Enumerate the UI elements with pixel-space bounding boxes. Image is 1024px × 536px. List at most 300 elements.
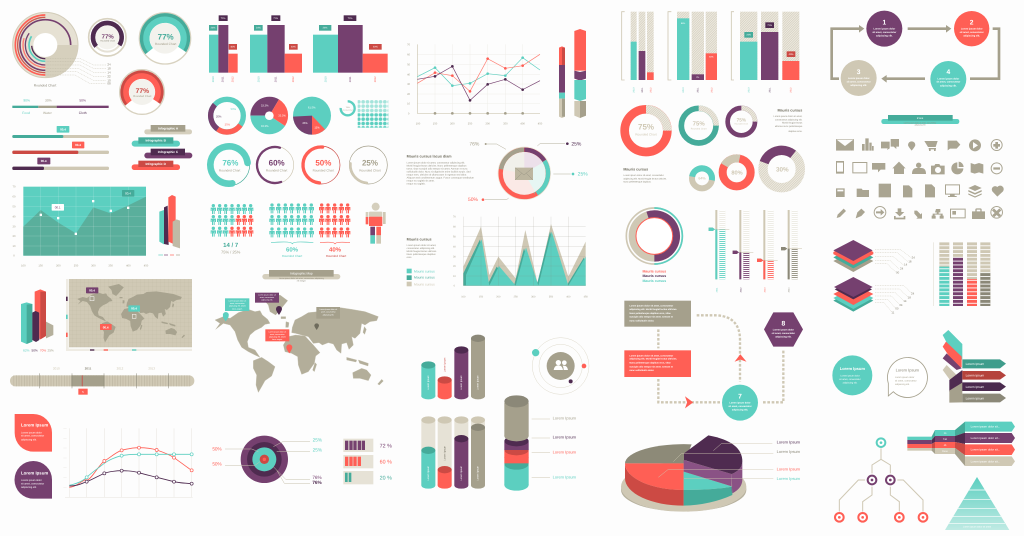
world map <box>215 295 383 392</box>
text: mauris cursus right: ultricies nunc pellentesque <box>775 125 802 128</box>
step 7 circle <box>722 385 758 421</box>
target chart with percent labels: 25% <box>313 447 322 453</box>
node tree <box>835 438 927 522</box>
area chart: 00.1 <box>55 206 61 209</box>
icon: pencil <box>837 209 846 218</box>
progress bars with tags: 00.4 <box>41 159 47 163</box>
donut: teal 75% <box>681 105 719 143</box>
hatched bar group large: 2012 <box>790 87 792 93</box>
cylinders row two with full height tracks: Lorem Ipsum <box>460 466 463 481</box>
dotted world map with tags: 00.4 <box>89 289 95 292</box>
icon: doc two <box>925 184 935 197</box>
funnel arrows: 20 <box>944 432 946 435</box>
layer stack one leaders: 18 <box>908 260 912 263</box>
area chart: 00.4 <box>125 192 131 195</box>
text: mauris cursus lacus diam: neque eu sagittis. <box>407 182 425 185</box>
donut: teal 77%: 77% <box>158 32 174 41</box>
area chart <box>13 185 148 267</box>
donut: hatched 30%: 30% <box>776 166 789 173</box>
ribbon title: infographic map <box>262 270 340 282</box>
text: mauris cursus left: Nunc pellentesque dapibus. <box>623 181 651 183</box>
people grid 60% / 40% <box>269 203 350 258</box>
labels of concentric chart: 14 <box>107 71 111 74</box>
3D pie chart: Lorem Ipsum <box>777 449 800 454</box>
text box: coral <box>624 350 691 377</box>
labels of concentric chart <box>34 63 111 88</box>
layered area chart: 250 <box>514 295 518 298</box>
text and legend: mauris cursus: Mauris cursus <box>414 276 435 280</box>
ring chart with envelope icon <box>468 141 588 206</box>
speech bubble: adipiscing elit. <box>895 383 910 386</box>
batteries with percentages: 72 % <box>380 443 392 449</box>
multi-line chart: 70 <box>407 43 410 46</box>
ribbon: icons: adipiscing elit <box>914 124 926 126</box>
callout: teal <box>223 298 249 321</box>
callout: teal: amet, consectetur <box>230 303 245 305</box>
ribbon: icons: Icons <box>917 117 923 120</box>
bar chart large: 2012 <box>374 76 377 82</box>
radial gauge with legend: Mauris cursus <box>642 279 666 283</box>
callout: coral: Lorem ipsum dolor sit <box>269 331 286 333</box>
donut: purple 77%: 77% <box>102 33 114 40</box>
step 4 circle <box>930 61 966 97</box>
rounded chart 50%: Rounded Chart <box>313 169 334 172</box>
text box: coral: nunc sollicitudin dolor. <box>629 369 654 372</box>
ribbon title: infographic map: elit integer <box>297 280 306 282</box>
timeline slider: 2012 <box>117 367 123 370</box>
cylinders row one: Lorem Ipsum <box>460 375 463 390</box>
pie with centre hole: 33.3% <box>261 125 268 128</box>
batteries with percentages: 20 % <box>380 475 392 481</box>
big stacked cylinder <box>504 395 576 491</box>
icon: id card <box>950 209 966 218</box>
text box: taupe: nunc sollicitudin dolor. <box>629 320 654 322</box>
card: coral lorem ipsum: Lorem ipsum dolor <box>21 431 42 434</box>
text and legend: mauris cursus: consectetur adipiscing elit. <box>407 247 435 250</box>
striped column chart <box>934 242 990 306</box>
bar chart large: 2010 <box>324 76 327 82</box>
area chart: 200 <box>56 264 61 267</box>
step 4 circle: sit amet, consectetur <box>936 80 960 83</box>
card: purple lorem ipsum: adipiscing elit. <box>21 486 37 489</box>
layered area chart <box>453 215 588 298</box>
text and legend: mauris cursus <box>407 237 437 286</box>
donut: purple 75% <box>728 106 757 135</box>
card: coral lorem ipsum: sit amet, consectetur <box>21 434 44 437</box>
bar chart small: 71% <box>221 17 225 20</box>
step 7 circle: Lorem ipsum dolor <box>729 402 751 404</box>
icon: map <box>971 163 983 174</box>
text and legend: mauris cursus: Lorem ipsum dolor sit amet, <box>407 244 436 247</box>
layered area chart: 350 <box>549 295 553 298</box>
funnel arrows: Lorem ipsum dolor sit... <box>971 460 1000 463</box>
icon: minus <box>991 162 1003 174</box>
cylinders row two with full height tracks: Lorem Ipsum <box>427 466 430 481</box>
step 2 circle: adipiscing elit. <box>963 34 980 37</box>
step 3 circle: 3 <box>857 68 861 76</box>
dot pattern stat <box>341 100 388 128</box>
3D bars with percentages: 50% <box>31 349 38 353</box>
ring chart with envelope icon: 25% <box>571 141 581 147</box>
bar chart medium <box>250 15 302 82</box>
step 1 circle: Lorem ipsum dolor <box>873 27 895 30</box>
callout: coral: adipiscing elit. Morbi <box>269 336 286 338</box>
callout: purple: amet, consectetur <box>260 297 274 299</box>
bar chart medium: 71% <box>273 17 278 20</box>
stacked bar with labels: 50% <box>79 99 86 103</box>
layer stack two leaders: 24 <box>911 292 914 295</box>
3D bars with percentages: 25% <box>47 349 54 353</box>
layered area chart: 200 <box>496 295 500 298</box>
step 1 circle: adipiscing elit. <box>876 34 893 37</box>
progress bars with tags: 00.4 <box>75 143 81 147</box>
bar chart large: 40% <box>373 46 378 48</box>
icon: hierarchy <box>932 209 944 219</box>
stacked bar with labels: Cloth <box>79 111 87 115</box>
multi-line chart: 50 <box>407 63 410 66</box>
icon: people <box>912 163 926 174</box>
radial gauge with legend: Mauris cursus <box>642 274 666 278</box>
step 3 circle: adipiscing elit. <box>850 84 867 87</box>
labels of concentric chart: Rounded Chart <box>34 84 56 88</box>
folded ribbon arrows: Lorem Ipsum <box>966 374 984 378</box>
icon: envelope <box>836 139 854 151</box>
cylinders row one: Lorem Ipsum <box>476 375 479 390</box>
thermometer gauges: 2011 <box>716 288 718 292</box>
step 1 circle: sit amet, consectetur <box>872 31 896 34</box>
icon: pin <box>908 141 915 151</box>
callout: taupe <box>314 307 340 330</box>
labels of concentric chart: 22 <box>107 75 111 78</box>
labels of concentric chart: 10 <box>107 79 111 82</box>
donut: teal 75%: Rounded Chart <box>691 127 707 130</box>
area chart: 10 <box>13 245 16 248</box>
panel: column five, top <box>832 11 1004 219</box>
text box: coral: Lorem ipsum dolor sit amet, consectetur <box>629 355 673 357</box>
labels of concentric chart: 24 <box>107 63 111 66</box>
teal circle card <box>832 355 872 395</box>
donut: teal 64% <box>690 167 714 190</box>
callout: purple: adipiscing elit. <box>261 299 273 301</box>
hatched bar group medium: 50% <box>709 56 714 58</box>
layered area chart: 300 <box>531 295 535 298</box>
step 2 circle: sit amet, consectetur <box>960 31 984 34</box>
big stacked cylinder: Lorem Ipsum <box>553 475 576 479</box>
pie chart: 12% <box>314 126 320 129</box>
text box: taupe: Lorem ipsum dolor sit amet, consectetur <box>629 305 673 307</box>
timeline slider <box>10 367 194 395</box>
people grid 14 / 7 <box>211 204 253 255</box>
layer stack two leaders: 00 <box>895 307 899 310</box>
ribbon: icons <box>881 115 959 126</box>
hatched bar group large: 2011 <box>769 87 771 93</box>
icon: heart <box>992 186 1004 197</box>
rounded chart 50% <box>301 145 340 184</box>
donut: coral 77%: Rounded Chart <box>133 95 152 98</box>
step 2 circle: Lorem ipsum dolor <box>961 27 983 30</box>
callout: taupe: adipiscing elit. <box>323 314 334 316</box>
text box: taupe <box>624 301 691 327</box>
bar chart medium: 24% <box>256 27 261 29</box>
icon: arrow down right <box>914 211 922 219</box>
text: mauris cursus left: Mauris cursus <box>623 167 648 171</box>
icon: play <box>969 139 981 151</box>
speech bubble: sit amet, consectetur <box>895 379 917 382</box>
people grid 14 / 7: 14 / 7 <box>223 242 238 248</box>
icon: house <box>892 162 906 174</box>
icon: phone <box>836 161 844 174</box>
bar chart small: 2012 <box>231 76 234 82</box>
stacked bar with labels: 90% <box>23 99 30 103</box>
funnel arrows: Lorem ipsum dolor sit... <box>971 425 1000 428</box>
multi-line chart: 450 <box>538 122 542 125</box>
donut: purple 77%: Rounded Chart <box>100 40 115 42</box>
pie with centre hole: 33.3% <box>261 104 268 107</box>
card: purple lorem ipsum: Lorem Ipsum <box>21 470 48 475</box>
rounded chart 76%: Rounded Chart <box>219 169 241 172</box>
hatched bar group medium: 2010 <box>682 87 685 93</box>
area chart: 350 <box>108 264 113 267</box>
ribbons: infographic A to D <box>132 125 192 170</box>
card: purple lorem ipsum <box>14 461 52 499</box>
area chart: 100 <box>21 264 26 267</box>
rounded chart 60%: Rounded Chart <box>266 169 288 172</box>
text: mauris cursus left <box>623 167 667 183</box>
folded ribbon arrows: Lorem Ipsum <box>966 362 984 366</box>
text box: taupe: adipiscing elit. Morbi feugiat lectus ultricies. <box>629 308 677 311</box>
curve line chart <box>63 428 193 497</box>
batteries with percentages <box>343 439 392 484</box>
icon: tag <box>948 141 960 150</box>
radial gauge with legend <box>626 208 682 283</box>
bar chart large <box>313 15 388 82</box>
icon: folder <box>857 189 869 197</box>
stacked bar with labels <box>12 99 109 115</box>
icon: layers <box>968 185 982 198</box>
labels of concentric chart: 18 <box>107 67 111 70</box>
target chart with percent labels <box>212 436 322 485</box>
icon: cart <box>924 141 938 151</box>
bar chart small <box>209 15 238 82</box>
icon: briefcase <box>972 208 985 219</box>
callout: coral: lacus augue. <box>272 339 283 341</box>
dotted connector paths <box>658 315 783 402</box>
dotted world map with tags <box>66 279 192 351</box>
icon: camera <box>931 164 945 174</box>
rounded chart 60%: 60% <box>269 159 285 168</box>
callout: purple <box>255 293 282 315</box>
stacked bar with labels: Water <box>43 111 52 115</box>
multi-colour donut: 25% <box>225 123 230 126</box>
progress bars with tags: 00.4 <box>60 128 66 131</box>
layer stack two leaders: 24 <box>899 303 903 307</box>
thermometer gauges: 2014 <box>788 287 790 292</box>
text: mauris cursus lacus diam: sollicitudin dolor. Nunc sit dignissim enim facilisis turpis. Sed <box>407 170 471 173</box>
area chart: 150 <box>38 264 43 267</box>
ribbon: icons: Lorem ipsum dolor sit amet, consectetur <box>904 122 936 124</box>
funnel arrows: Lorem ipsum dolor sit... <box>971 448 1000 451</box>
area chart: 50 <box>13 205 16 208</box>
bar chart small: 24% <box>211 27 215 29</box>
cylinders row one: Lorem Ipsum <box>427 375 430 390</box>
icon: calculator <box>836 188 845 197</box>
big person figure <box>366 203 386 244</box>
text: mauris cursus lacus diam: tortor, vitae suscipit odio tempor sit amet. Aenean et nunc <box>407 167 468 170</box>
hatched bar group large <box>731 12 799 93</box>
step 7 circle: 7 <box>738 393 742 400</box>
pie chart <box>293 97 331 135</box>
teal circle card: Lorem Ipsum <box>840 366 865 371</box>
3D pie chart: Lorem Ipsum <box>777 476 800 481</box>
ring chart with envelope icon: 76% <box>469 141 479 147</box>
ribbons: infographic A to D: Infographic D <box>145 162 166 166</box>
ribbon title: infographic map: Lorem ipsum dolor sit amet, consectetur adipiscing <box>279 277 324 280</box>
cylinders row one: Lorem Ipsum <box>443 358 446 372</box>
text: mauris cursus lacus diam: Morbi feugiat lectus ultricies. Nunc pellentesque dapibus <box>407 164 467 167</box>
donut: coral 80%: 80% <box>731 169 743 176</box>
folded ribbon arrows: Lorem Ipsum <box>966 397 984 401</box>
hatched bar group medium <box>668 12 717 93</box>
text: mauris cursus left: Lorem ipsum dolor sit amet, consectetur <box>623 174 664 177</box>
panel: column four, top <box>622 12 806 292</box>
step 4 circle: Lorem ipsum dolor <box>937 77 959 80</box>
bar chart large: 71% <box>348 17 352 20</box>
hatched bar group large: 24% <box>746 34 751 36</box>
teal circle card: adipiscing elit. <box>843 382 857 384</box>
layer stack two <box>833 277 873 312</box>
donut: coral 75%: Rounded Chart <box>635 133 657 136</box>
hatched bar group medium: 90% <box>681 22 685 25</box>
card: coral lorem ipsum <box>15 414 52 452</box>
text: mauris cursus right: dapibus eros. <box>788 130 802 133</box>
layer stack two leaders: 14 <box>903 299 907 303</box>
icon: people orbit <box>532 338 589 394</box>
people grid 60% / 40%: 40% <box>329 246 341 253</box>
area chart: 0 <box>13 254 15 257</box>
step 2 circle: 2 <box>970 19 974 26</box>
callout: taupe: amet, consectetur <box>321 311 336 313</box>
3D bars with percentages <box>21 289 54 353</box>
icon: plus <box>991 139 1003 151</box>
3D bars small <box>158 195 180 255</box>
hatched bar group small: 2012 <box>650 87 652 93</box>
icon: bars <box>862 138 874 151</box>
text and legend: mauris cursus: eros. <box>407 256 412 259</box>
area chart: 250 <box>74 264 78 267</box>
step 2 circle <box>954 11 989 46</box>
icon: pie <box>951 162 964 174</box>
pie chart: 25% <box>302 122 308 125</box>
pie chart: 61.5% <box>308 106 315 109</box>
text: mauris cursus right <box>774 109 802 133</box>
pie with centre hole: 33.3% <box>278 114 286 117</box>
icon: pen <box>856 209 865 218</box>
ring chart with envelope icon: 50% <box>468 197 478 202</box>
donut: coral 75% <box>625 105 672 152</box>
funnel arrows: 45 <box>944 444 946 447</box>
layered area chart: 100 <box>461 295 465 298</box>
text box: coral: adipiscing elit. Morbi feugiat lectus ultricies. <box>629 358 677 360</box>
3D pie chart: Lorem Ipsum <box>777 467 800 472</box>
layered area chart: 40 <box>453 245 456 248</box>
icon: doc one <box>903 185 912 197</box>
callout: taupe: Lorem ipsum dolor sit <box>320 309 337 311</box>
panel: column one, bottom charts <box>10 279 194 499</box>
batteries with percentages: 60 % <box>380 459 392 465</box>
cylinders row one <box>421 335 485 399</box>
thermometer gauges <box>709 210 802 292</box>
people grid 14 / 7: 75% / 25% <box>221 250 240 255</box>
callout: teal: Lorem ipsum dolor sit <box>229 300 246 302</box>
teal circle card: sit amet, consectetur <box>839 378 861 381</box>
layered area chart: 0 <box>454 284 455 287</box>
donut: teal 64%: 64% <box>698 177 706 181</box>
text and legend: mauris cursus: Mauris cursus <box>414 283 435 286</box>
area chart: 60 <box>13 195 16 198</box>
layered area chart: 70 <box>453 215 456 218</box>
pyramid <box>945 477 1009 530</box>
layer stack two leaders: 18 <box>908 296 911 299</box>
speech bubble <box>887 358 927 398</box>
icon: arrow circle <box>874 206 886 219</box>
bar chart small: 40% <box>230 46 235 48</box>
text: mauris cursus lacus diam: neque sem, ultricies sit ullamcorper in egestas sed dolor. <box>407 173 467 176</box>
hatched bar group large: 2010 <box>748 87 750 93</box>
card: purple lorem ipsum: Lorem ipsum dolor <box>21 479 42 482</box>
card: coral lorem ipsum: Lorem Ipsum <box>21 423 48 428</box>
step 8 hexagon: Lorem ipsum dolor <box>773 329 794 331</box>
stacked bar with labels: 30% <box>45 99 52 103</box>
text and legend: mauris cursus: Morbi feugiat lectus ultricies. <box>407 250 437 253</box>
step 3 circle: Lorem ipsum dolor <box>848 77 870 80</box>
panel: column two, bottom <box>212 270 392 485</box>
bar chart medium: 2011 <box>274 76 277 82</box>
ribbons: infographic A to D: Infographic B <box>145 139 166 142</box>
text: mauris cursus right: Morbi feugiat lectus <box>782 122 802 124</box>
hatched bar group medium: 2012 <box>711 87 713 93</box>
ring chart with envelope icon: 25% <box>578 171 588 177</box>
cylinders row two with full height tracks <box>421 416 485 489</box>
layered area chart: 60 <box>453 225 456 228</box>
layer stack one leaders <box>875 249 915 274</box>
step 7 circle: sit amet, consectetur <box>728 405 752 408</box>
hatched bar group small: 2010 <box>633 87 635 93</box>
multi-line chart: 20 <box>407 93 410 96</box>
dotted world map with tags: 00.4 <box>131 307 137 310</box>
teal circle card: Lorem ipsum dolor <box>840 375 860 377</box>
text: mauris cursus right: Mauris cursus <box>777 109 802 113</box>
dotted world map with tags: 00.4 <box>103 326 109 329</box>
labels of concentric chart: 08 <box>107 82 111 85</box>
layered area chart: 400 <box>566 295 570 298</box>
bar chart small: 2010 <box>212 76 215 82</box>
big stacked cylinder: Lorem Ipsum <box>553 435 576 440</box>
text: mauris cursus lacus diam <box>407 154 474 185</box>
area chart: 40 <box>13 215 16 218</box>
bar chart large: 2011 <box>349 76 352 82</box>
icon: book <box>879 184 891 197</box>
layered area chart: 10 <box>453 275 456 278</box>
layer stack two leaders: 11 <box>891 311 894 314</box>
3D bars with percentages: 62% <box>23 349 30 353</box>
donut: teal 75%: 75% <box>693 120 705 127</box>
target chart with percent labels: 50% <box>212 446 222 452</box>
area chart: 400 <box>126 264 131 267</box>
layered area chart: 30 <box>453 255 456 258</box>
bar chart medium: 2012 <box>292 76 295 82</box>
multi-line chart: 150 <box>433 122 437 125</box>
3D stacked column wide <box>574 29 586 118</box>
